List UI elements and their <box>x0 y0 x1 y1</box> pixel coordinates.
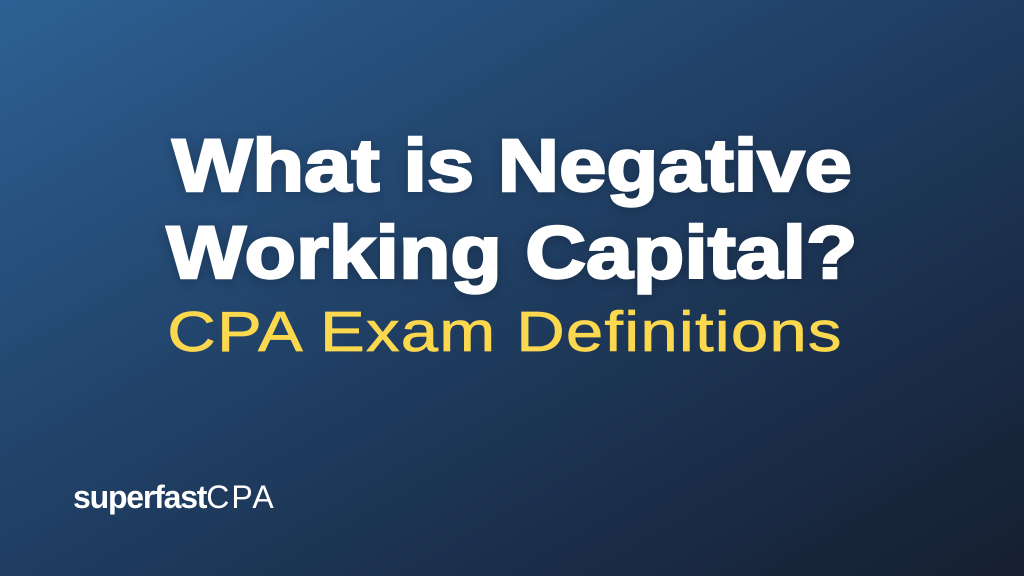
title: What is Negative <box>172 124 852 207</box>
logo: superfastCPA: superfastCPA <box>73 479 276 515</box>
title <box>164 124 857 298</box>
title: Working Capital? <box>166 211 857 294</box>
subtitle: CPA Exam Definitions <box>167 300 843 364</box>
